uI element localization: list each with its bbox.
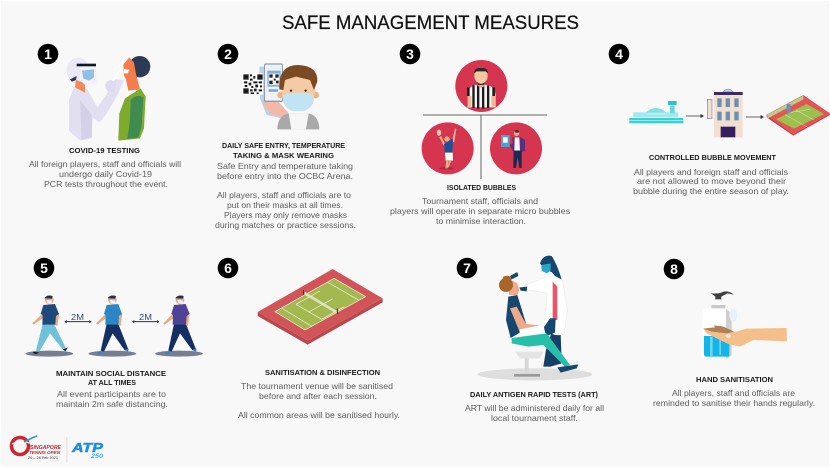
body text: reminded to sanitise their hands regularly.: [653, 398, 815, 408]
icon: QR scan and masked person: [242, 63, 319, 129]
icon: official bubble: [490, 122, 542, 174]
logo: Singapore Tennis Open: 20 – 28 Feb 2021: [28, 456, 58, 460]
body text: are not allowed to move beyond their: [637, 176, 786, 186]
number badge 5: 5: [40, 260, 48, 276]
icon: tennis venue: [767, 95, 830, 136]
logo: ATP 250: [71, 440, 104, 460]
heading: DAILY ANTIGEN RAPID TESTS (ART): [470, 390, 599, 399]
panel: social distance: [25, 258, 203, 409]
number badge 1: 1: [44, 46, 52, 62]
icon: airport: [629, 101, 683, 123]
body text: put on their masks at all times.: [227, 200, 343, 210]
body text: Safe Entry and temperature taking: [217, 161, 353, 171]
icon: player bubble: [422, 122, 474, 174]
number badge 4: [609, 44, 629, 64]
body text: bubble during the entire season of play.: [633, 186, 789, 196]
body text: [238, 381, 400, 420]
number badge 3: [400, 44, 420, 64]
logo: ATP 250: ATP: [71, 440, 103, 455]
body text: Players may only remove masks: [224, 210, 347, 220]
logo: Singapore Tennis Open: [12, 436, 62, 460]
logo: ATP 250: 250: [90, 454, 104, 460]
body text: All players and foreign staff and officials: [634, 167, 788, 177]
body text: All common areas will be sanitised hourly.: [238, 410, 400, 420]
title: SAFE MANAGEMENT MEASURES: [282, 13, 579, 34]
body text: All event participants are to: [57, 389, 166, 399]
body text: players will operate in separate micro bubbles: [390, 206, 570, 216]
panel: covid-19 testing: [29, 44, 181, 189]
panel: sanitisation and disinfection: [218, 258, 400, 420]
icon: sanitiser bottle and hand: [702, 291, 787, 358]
heading: DAILY SAFE ENTRY, TEMPERATURE: [222, 141, 345, 150]
panel: controlled bubble movement: [609, 44, 830, 196]
heading: [56, 369, 166, 387]
body text: All foreign players, staff and officials will: [29, 159, 181, 169]
icon: referee bubble: [455, 60, 507, 112]
body text: [465, 403, 604, 423]
body text: All players, staff and officials are: [672, 388, 795, 398]
heading: ISOLATED BUBBLES: [447, 183, 516, 192]
body text: undergo daily Covid-19: [59, 169, 152, 179]
number badge 2: 2: [224, 46, 232, 62]
number badge 8: [664, 259, 684, 279]
distance label: 2M: [139, 312, 152, 322]
logo: Singapore Tennis Open: TENNIS OPEN: [29, 450, 61, 455]
arrow: airport to hotel: [686, 114, 704, 118]
divider: [66, 437, 68, 462]
number badge 3: 3: [406, 46, 414, 62]
heading: AT ALL TIMES: [88, 378, 136, 387]
panel: daily antigen rapid tests: [457, 256, 604, 423]
body text: during matches or practice sessions.: [215, 220, 356, 230]
number badge 1: [38, 44, 58, 64]
heading: TAKING & MASK WEARING: [233, 151, 334, 160]
body text: [653, 388, 815, 408]
body text: [215, 161, 356, 230]
icon: swab test illustration: [67, 56, 150, 141]
heading: CONTROLLED BUBBLE MOVEMENT: [649, 153, 776, 162]
body text: before entry into the OCBC Arena.: [217, 171, 353, 181]
heading: MAINTAIN SOCIAL DISTANCE: [56, 369, 166, 378]
heading: COVID-19 TESTING: [69, 146, 140, 155]
panel: isolated bubbles: [390, 44, 570, 226]
heading: SANITISATION & DISINFECTION: [265, 368, 380, 377]
body text: maintain 2m safe distancing.: [56, 399, 168, 409]
number badge 6: 6: [224, 260, 232, 276]
distance label: 2M: [71, 312, 84, 322]
number badge 6: [218, 258, 238, 278]
heading: [222, 141, 345, 160]
body text: [633, 167, 789, 196]
number badge 4: 4: [615, 46, 623, 62]
icon: hotel: [707, 89, 743, 137]
icon: isometric tennis court: [258, 269, 383, 345]
arrow: hotel to court: [746, 115, 764, 119]
heading: HAND SANITISATION: [696, 375, 773, 384]
body text: [56, 389, 168, 409]
logo: Singapore Tennis Open: SINGAPORE: [30, 445, 62, 451]
body text: PCR tests throughout the event.: [44, 179, 168, 189]
logos: [12, 436, 104, 462]
body text: ART will be administered daily for all: [465, 403, 604, 413]
panel: hand sanitisation: [653, 259, 815, 408]
body text: local tournament staff.: [491, 413, 578, 423]
body text: The tournament venue will be sanitised: [241, 381, 393, 391]
number badge 2: [218, 44, 238, 64]
body text: Tournament staff, officials and: [422, 196, 538, 206]
body text: [29, 159, 181, 189]
body text: before and after each session.: [259, 391, 377, 401]
icon: walking people with distance arrows: [25, 296, 203, 357]
number badge 7: [457, 258, 477, 278]
icon: antigen test illustration: [478, 256, 592, 380]
body text: to minimise interaction.: [436, 216, 526, 226]
number badge 7: 7: [463, 260, 471, 276]
org chart connector lines: [423, 115, 547, 179]
body text: [390, 196, 570, 226]
body text: All players, staff and officials are to: [217, 190, 351, 200]
number badge 8: 8: [670, 261, 678, 277]
panel: daily safe entry: [215, 44, 356, 230]
number badge 5: [34, 258, 54, 278]
